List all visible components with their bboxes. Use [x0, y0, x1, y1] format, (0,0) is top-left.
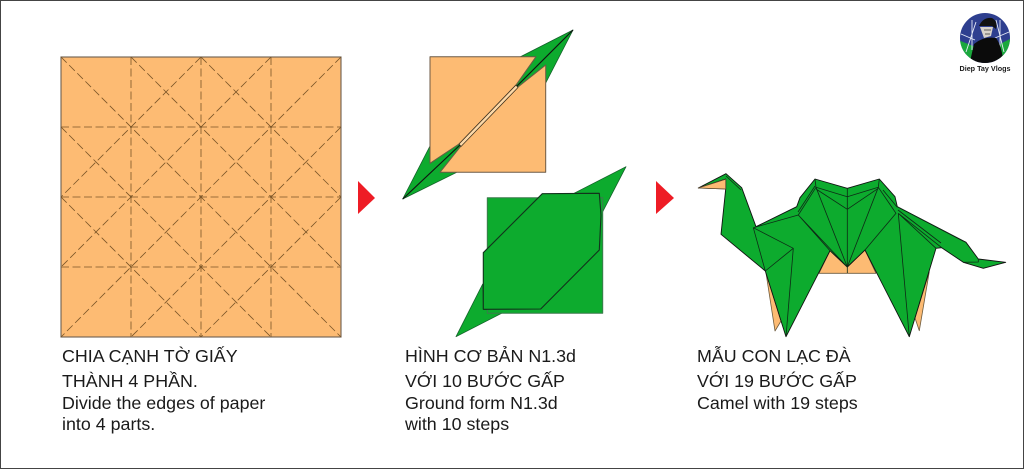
- text: step 3 caption: Camel with 19 steps: [697, 393, 858, 413]
- text: step 1 caption: into 4 parts.: [62, 414, 155, 434]
- camel: paper underside: [698, 179, 929, 331]
- arrow: step 1 to step 2: [358, 181, 375, 214]
- text: step 3 caption: VỚI 19 BƯỚC GẤP: [697, 370, 857, 391]
- text: step 2 caption: [404, 345, 576, 434]
- text: step 1 caption: CHIA CẠNH TỜ GIẤY: [62, 345, 238, 366]
- figure: ground form back side: [456, 167, 626, 337]
- text: step 2 caption: HÌNH CƠ BẢN N1.3d: [405, 345, 576, 366]
- text: step 1 caption: Divide the edges of paper: [62, 393, 265, 413]
- logo: Diep Tay Vlogs: [958, 13, 1012, 73]
- figure: ground form front side: [403, 30, 573, 199]
- text: step 3 caption: [697, 345, 858, 413]
- text: step 1 caption: THÀNH 4 PHẦN.: [62, 370, 198, 391]
- text: step 1 caption: [62, 345, 265, 434]
- arrow: step 2 to step 3: [656, 181, 674, 214]
- camel: fold lines: [726, 176, 978, 337]
- figure: origami camel: [698, 174, 1006, 337]
- logo: Diep Tay Vlogs: Diep Tay Vlogs: [960, 64, 1010, 73]
- panel: paper divided into 4 parts: [61, 57, 341, 337]
- text: step 2 caption: VỚI 10 BƯỚC GẤP: [405, 370, 565, 391]
- text: step 2 caption: Ground form N1.3d: [405, 393, 558, 413]
- text: step 2 caption: with 10 steps: [404, 414, 509, 434]
- text: step 3 caption: MẪU CON LẠC ĐÀ: [697, 345, 851, 366]
- camel: green body: [698, 174, 1006, 337]
